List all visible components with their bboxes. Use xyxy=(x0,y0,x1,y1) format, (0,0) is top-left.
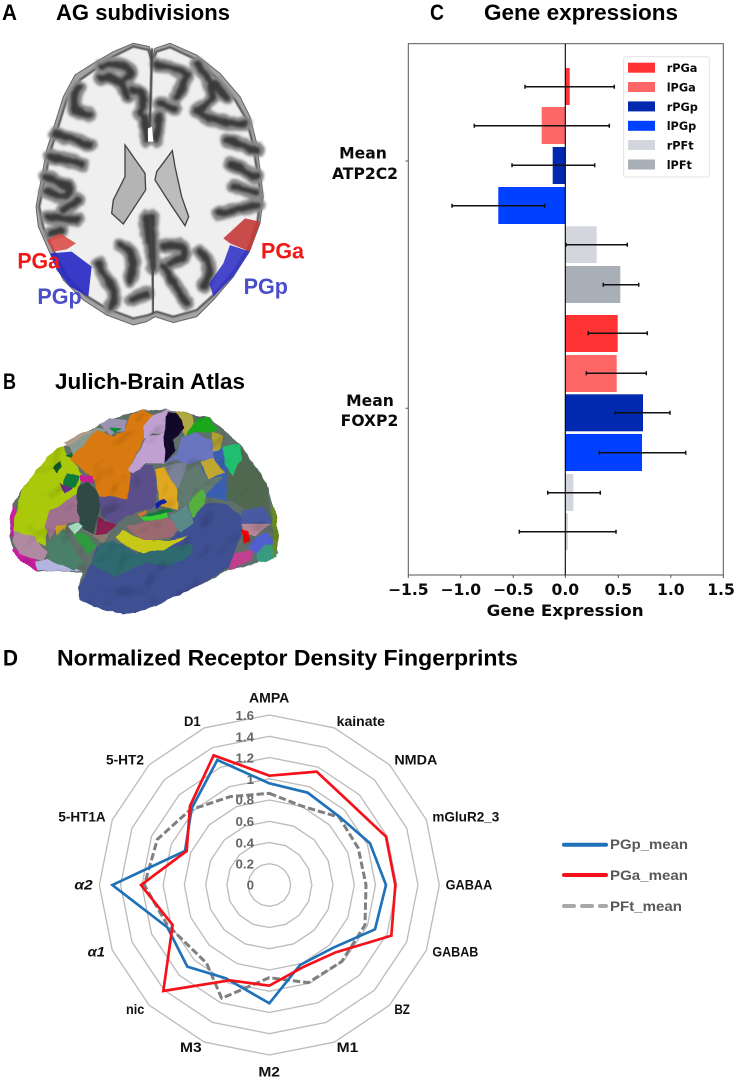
axis labels: M3 xyxy=(180,1040,202,1055)
heading: Gene expressions: Gene expressions xyxy=(484,0,678,25)
y label ATP2C2 xyxy=(332,145,398,183)
axis labels: D1 xyxy=(184,714,201,729)
legend: rPGa xyxy=(667,62,697,75)
axis labels: GABAB xyxy=(432,945,478,960)
axis ticks xyxy=(406,161,723,578)
radar legend: PGa_mean xyxy=(610,867,688,883)
axis labels: BZ xyxy=(394,1002,410,1017)
right ventricle xyxy=(155,151,189,226)
panel letter A: A xyxy=(2,0,17,25)
radial scale values: 1 xyxy=(247,772,255,787)
x axis tick labels: −1.5 xyxy=(388,581,429,599)
panel C: Gene expressions xyxy=(332,0,735,620)
legend: lPGp xyxy=(667,120,696,133)
x axis tick labels: 0.0 xyxy=(551,581,579,599)
zero line xyxy=(564,44,566,575)
legend: rPGp xyxy=(667,101,698,114)
panel letter B: B xyxy=(3,369,16,394)
legend xyxy=(624,57,709,177)
radial scale values: 0 xyxy=(247,877,254,892)
label PGa right: PGa xyxy=(261,238,305,263)
y label ATP2C2: ATP2C2 xyxy=(332,165,398,183)
ATP2C2 bars xyxy=(498,68,620,303)
left ventricle xyxy=(112,145,146,224)
legend: lPGa xyxy=(667,81,696,94)
colored 3D brain atlas xyxy=(9,408,278,615)
label PGa left: PGa xyxy=(17,248,61,273)
PGa overlay left xyxy=(47,233,76,252)
axis labels: 5-HT2 xyxy=(106,753,144,768)
axis labels xyxy=(58,691,500,1079)
axis labels: mGluR2_3 xyxy=(432,810,500,825)
radial scale values: 0.4 xyxy=(235,835,255,850)
axis labels: NMDA xyxy=(394,753,437,768)
radar chart xyxy=(58,691,500,1079)
radial scale values xyxy=(235,708,255,892)
x axis tick labels: 1.0 xyxy=(657,581,685,599)
panel B: Julich-Brain Atlas xyxy=(3,369,278,615)
x axis tick labels: −0.5 xyxy=(493,581,534,599)
bar chart xyxy=(332,44,735,620)
radar legend: PFt_mean xyxy=(610,898,682,914)
y label ATP2C2: Mean xyxy=(339,145,387,163)
y label FOXP2: FOXP2 xyxy=(341,412,398,430)
error bars xyxy=(452,85,686,534)
radar legend xyxy=(564,836,688,914)
FOXP2 bars xyxy=(565,315,643,550)
heading: Normalized Receptor Density Fingerprints: Normalized Receptor Density Fingerprints xyxy=(57,646,518,671)
panel A: AG subdivisions xyxy=(2,0,305,325)
radial scale values: 1.6 xyxy=(235,708,254,723)
radar rings xyxy=(99,715,439,1055)
radial scale values: 1.2 xyxy=(235,750,254,765)
label PGp right: PGp xyxy=(244,274,288,299)
label PGp left: PGp xyxy=(37,284,82,309)
y label FOXP2 xyxy=(341,392,398,430)
x axis tick labels: −1.0 xyxy=(440,581,481,599)
legend: rPFt xyxy=(667,139,694,152)
panel D: Normalized Receptor Density Fingerprints xyxy=(3,646,688,1079)
radial scale values: 0.6 xyxy=(235,814,254,829)
radial scale values: 0.2 xyxy=(235,856,254,871)
radial scale values: 1.4 xyxy=(235,730,255,745)
PGa overlay right xyxy=(223,218,260,252)
heading: Julich-Brain Atlas: Julich-Brain Atlas xyxy=(55,369,245,394)
x axis tick labels: 0.5 xyxy=(604,581,632,599)
axis labels: GABAA xyxy=(446,877,492,892)
axis labels: α2 xyxy=(74,877,93,892)
radar legend: PGp_mean xyxy=(610,836,688,852)
y label FOXP2: Mean xyxy=(346,392,394,410)
axis labels: kainate xyxy=(337,714,385,729)
axis labels: AMPA xyxy=(249,691,289,706)
panel letter C: C xyxy=(430,0,444,25)
x axis tick labels xyxy=(388,581,735,599)
series PFt dashed xyxy=(144,793,366,998)
axis labels: α1 xyxy=(88,945,105,960)
radial scale values: 0.8 xyxy=(235,793,254,808)
brain axial slice xyxy=(17,43,305,325)
axis labels: M1 xyxy=(337,1040,359,1055)
axis labels: nic xyxy=(126,1002,145,1017)
PGp overlay left xyxy=(50,252,92,297)
axis labels: 5-HT1A xyxy=(58,810,106,825)
heading: AG subdivisions: AG subdivisions xyxy=(56,0,230,25)
x axis tick labels: 1.5 xyxy=(707,581,735,599)
series PGp blue xyxy=(112,760,386,1003)
x axis title: Gene Expression xyxy=(487,602,644,620)
panel letter D: D xyxy=(3,646,18,671)
legend: lPFt xyxy=(667,159,693,172)
series PGa red xyxy=(141,755,395,991)
PGp overlay right xyxy=(209,245,250,297)
